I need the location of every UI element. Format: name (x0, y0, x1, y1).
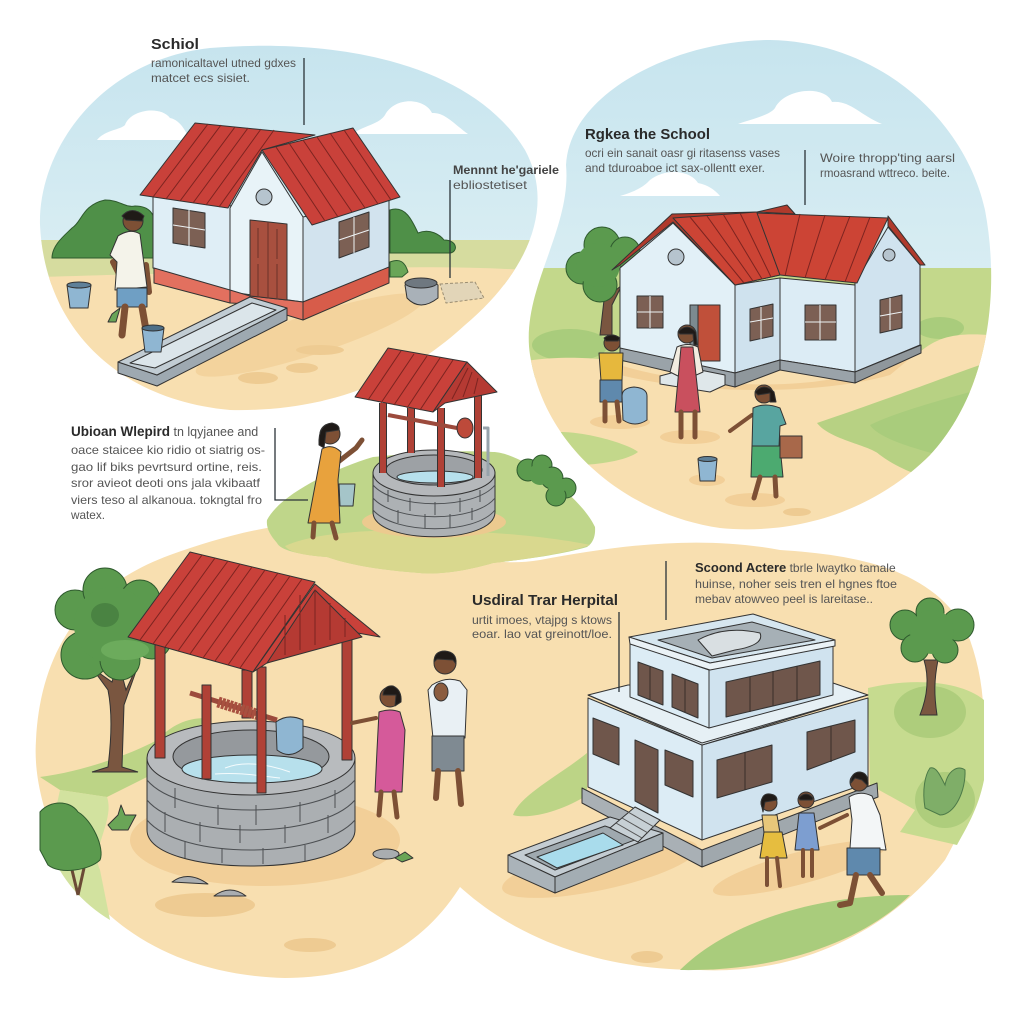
text block: hospital heading: Usdiral Trar Herpital (472, 592, 618, 609)
text block: hospital heading: urtit imoes, vtajpg s ktows (472, 613, 612, 627)
text block: top-left side note: ebliostetiset (453, 178, 528, 192)
icon: bush (517, 455, 576, 506)
text block: well description: viers teso al alkanoua. tokngtal fro (71, 493, 262, 507)
text block: well description: sror avieot deoti ons jala vkibaatf (71, 476, 261, 490)
panel: bottom scene ground (36, 522, 984, 978)
text block: top-left School (151, 36, 304, 125)
icon: clouds (97, 101, 468, 140)
panel: top-right school scene (528, 40, 992, 530)
text block: hospital heading (472, 592, 619, 692)
icons: bucket, plant, pot and stones (67, 278, 484, 322)
text block: top-left School: ramonicaltavel utned gdxes (151, 56, 296, 70)
building (582, 614, 878, 867)
text block: hospital side note: mebav atowveo peel is lareitase.. (695, 592, 873, 606)
text block: top-right school: Rgkea the School (585, 126, 710, 143)
figures: adult and children (760, 772, 886, 905)
icon: shrub (924, 768, 965, 815)
text block: top-right side note (820, 151, 955, 180)
green patch (267, 451, 595, 573)
text block: hospital side note: Scoond Actere tbrle lwaytko tamale (695, 560, 896, 575)
panel: small well (267, 348, 595, 573)
school building (612, 205, 925, 392)
panel: big well (40, 552, 467, 896)
figure: woman in orange dress (308, 423, 362, 538)
icon: tree (890, 598, 974, 715)
panel: hospital (508, 598, 974, 905)
text block: hospital side note: huinse, noher seis tren el hgnes ftoe (695, 577, 897, 591)
figures: family with water jar (599, 325, 802, 498)
figure: man with bucket (110, 210, 164, 352)
text block: hospital heading: eoar. lao vat greinott/loe. (472, 627, 612, 641)
pool and steps (508, 807, 663, 893)
icons: rocks and plant (108, 805, 413, 896)
icon: bush left (40, 803, 101, 895)
well structure (128, 552, 380, 866)
text block: top-right school: and tduroaboe ict sax-ollentt exer. (585, 161, 765, 175)
figures: woman and man (352, 651, 467, 817)
icon: clouds (620, 91, 882, 196)
icon: tree (566, 227, 640, 335)
ramp channel (118, 297, 287, 386)
text block: well description: oace staicee kio ridio ot siatrig os- (71, 443, 265, 457)
text block: top-right side note: Woire thropp'ting aarsl (820, 151, 955, 165)
text block: well description (70, 424, 308, 522)
lower tint of patch (285, 530, 590, 573)
icon: tree (55, 568, 171, 772)
text block: top-left side note (450, 163, 559, 278)
panel: top-left school scene (30, 40, 550, 420)
well structure (355, 348, 506, 538)
text block: top-right school: ocri ein sanait oasr gi ritasenss vases (585, 146, 780, 160)
text block: well description: watex. (70, 508, 105, 522)
text block: hospital side note (666, 560, 897, 620)
text block: top-left School: matcet ecs sisiet. (151, 71, 250, 85)
school building (140, 123, 400, 320)
text block: well description: gao lif biks pevrtsurd ortine, reis. (71, 460, 262, 474)
text block: top-right side note: rmoasrand wttreco. beite. (820, 166, 950, 180)
text block: top-right school (585, 126, 805, 205)
text block: top-left side note: Mennnt he'gariele (453, 163, 559, 177)
text block: well description: Ubioan Wlepird tn lqyjanee and (71, 424, 258, 439)
text block: top-left School: Schiol (151, 36, 199, 53)
icon: bushes (52, 200, 455, 277)
